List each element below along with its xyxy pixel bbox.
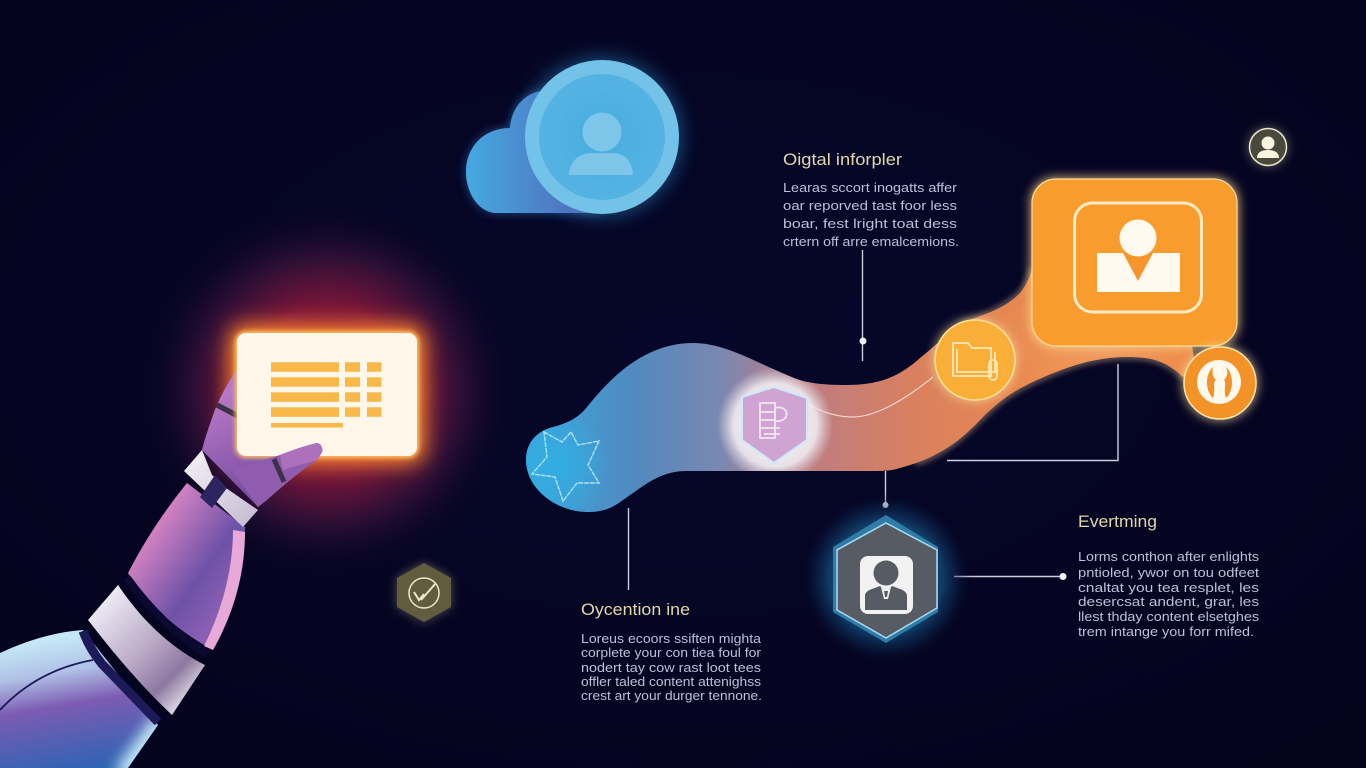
text block: Evertming: Evertming xyxy=(1078,513,1157,531)
text block: Oycention: Oycention ine xyxy=(581,601,690,619)
text block: Digital: Learas sccort inogatts affer xyxy=(783,181,957,195)
elbow band xyxy=(88,585,205,715)
text block: Digital: Oigtal inforpler xyxy=(783,151,903,169)
text block: Digital: oar reporved tast foor less xyxy=(783,199,957,213)
top right user badge xyxy=(1248,127,1288,167)
ribbon halo xyxy=(915,270,1195,463)
text block: Evertming: desercsat andent, grar, les xyxy=(1078,595,1259,609)
thin curve xyxy=(808,377,933,417)
text block: Digital: boar, fest lright toat dess xyxy=(783,217,957,231)
orange profile card xyxy=(1030,177,1239,348)
text block: Evertming: llest thday content elsetghes xyxy=(1078,610,1259,624)
hand and finger xyxy=(202,370,322,507)
flowing ribbon xyxy=(510,270,1195,515)
text block: Oycention: nodert tay cow rast loot tees xyxy=(581,661,761,675)
text block: Oycention xyxy=(581,601,762,703)
star icon xyxy=(532,432,599,501)
text block: Evertming: cnaltat you tea resplet, les xyxy=(1078,581,1259,595)
text block: Oycention: corplete your con tiea foul for xyxy=(581,646,761,660)
upper arm xyxy=(0,630,165,768)
wrist band xyxy=(184,450,258,527)
folder circle icon xyxy=(933,318,1017,402)
glowing card xyxy=(235,331,419,458)
user circle xyxy=(525,60,679,214)
text block: Digital xyxy=(783,151,959,249)
text block: Evertming: trem intange you forr mifed. xyxy=(1078,625,1254,639)
connector lines xyxy=(628,250,1118,590)
text block: Oycention: offler taled content attenighss xyxy=(581,675,761,689)
robot arm holding card xyxy=(0,331,419,768)
red glow behind card xyxy=(138,200,518,580)
card halo xyxy=(229,325,425,464)
shield icon xyxy=(742,387,807,463)
text block: Evertming xyxy=(1078,513,1260,639)
forearm xyxy=(128,483,245,650)
small hexagon check badge xyxy=(397,563,451,622)
card table icon xyxy=(271,362,382,428)
star glow xyxy=(526,425,592,504)
person portrait xyxy=(860,556,913,614)
text block: Digital: crtern off arre emalcemions. xyxy=(783,235,959,249)
ribbon glow at orange end xyxy=(960,300,1185,413)
cloud user icon xyxy=(466,59,680,215)
orange round icon xyxy=(1182,345,1258,421)
thumb xyxy=(232,443,322,507)
text block: Oycention: crest art your durger tennone. xyxy=(581,689,762,703)
text block: Evertming: pntioled, ywor on tou odfeet xyxy=(1078,566,1260,580)
cloud xyxy=(466,90,600,213)
shield glow xyxy=(718,369,832,471)
text block: Oycention: Loreus ecoors ssiften mighta xyxy=(581,632,761,646)
profile pin icon xyxy=(1097,220,1180,292)
hexagon person icon xyxy=(800,492,972,664)
text block: Evertming: Lorms conthon after enlights xyxy=(1078,550,1259,564)
